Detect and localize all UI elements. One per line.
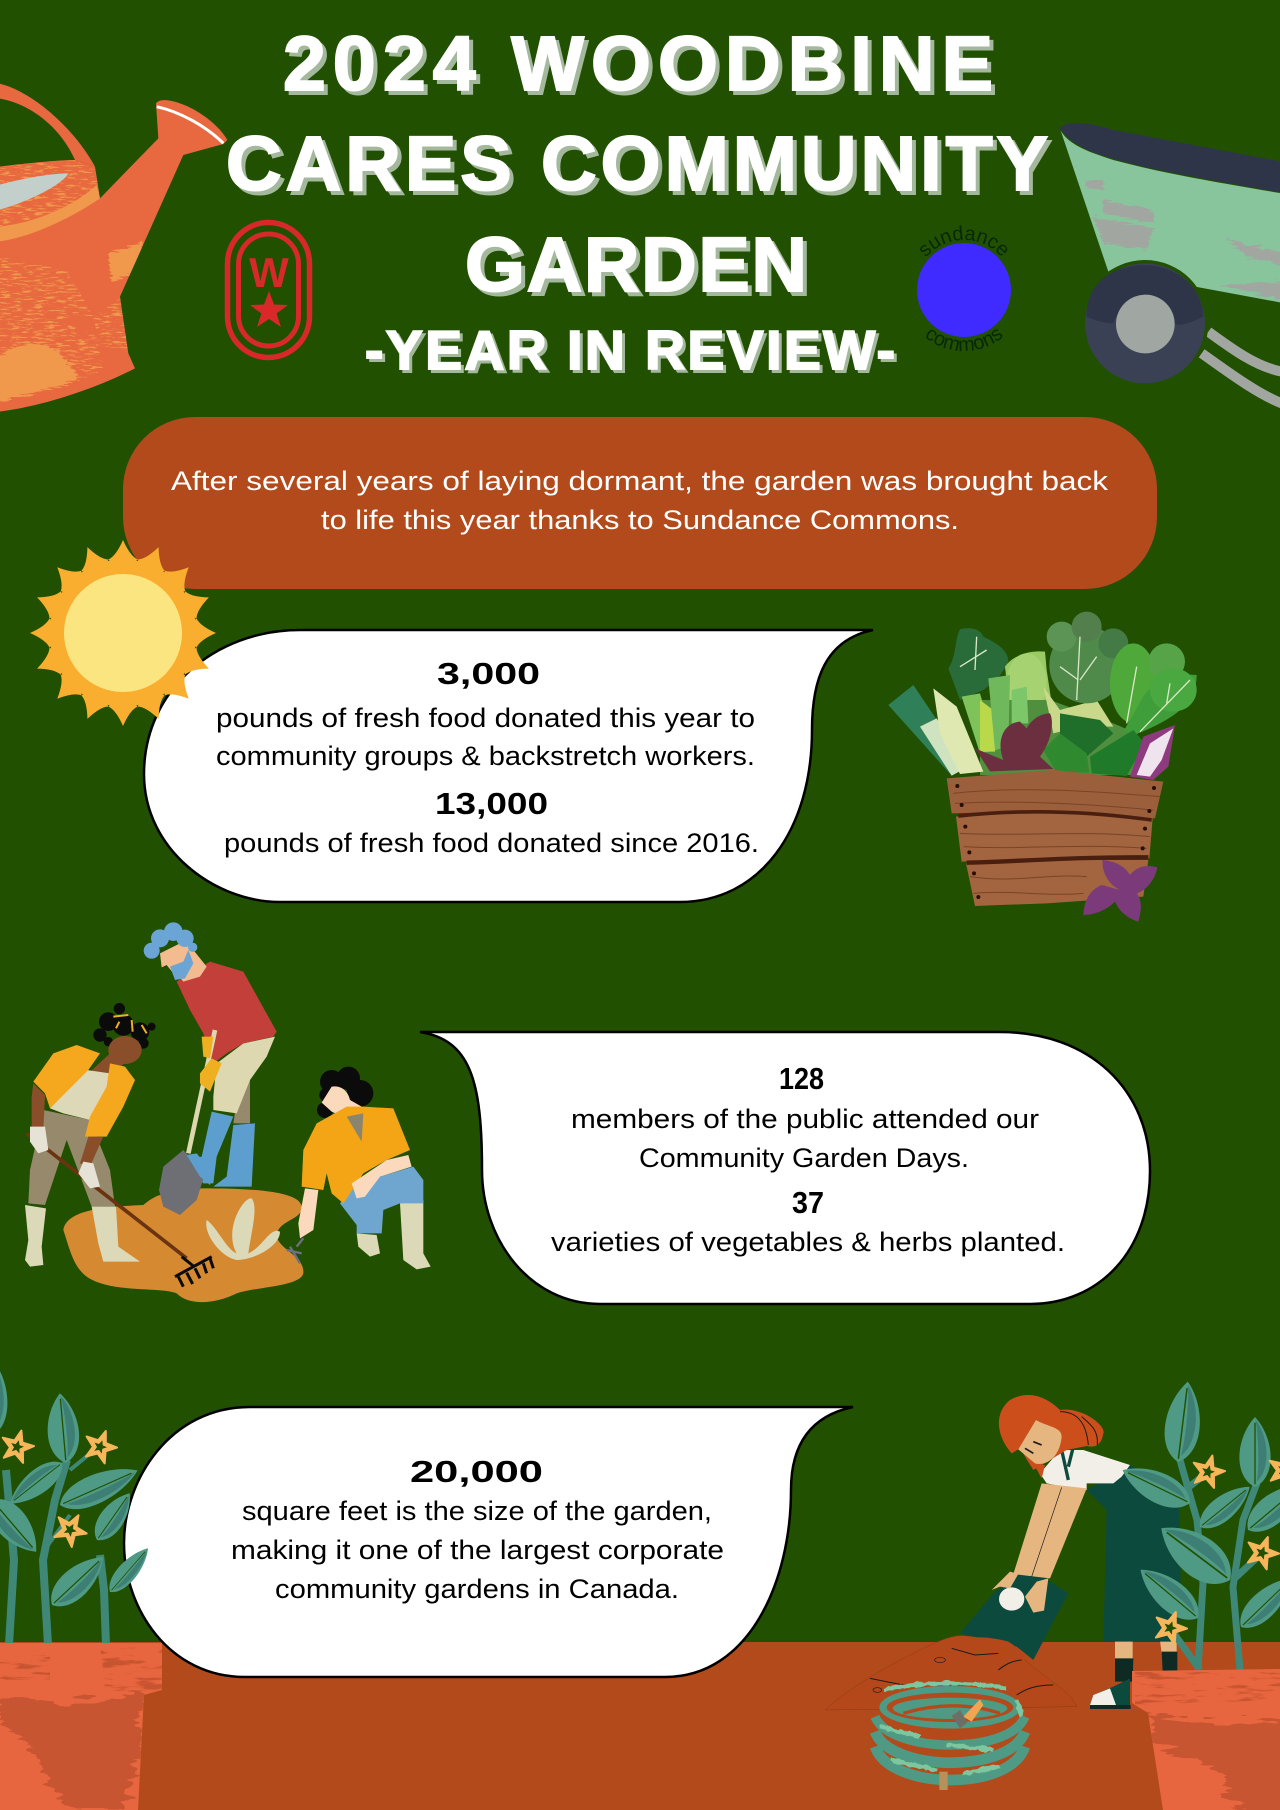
soil patch	[63, 1188, 303, 1302]
logo: Woodbine: W	[249, 249, 289, 296]
logo: Woodbine	[228, 222, 310, 358]
panel: speech bubble community days	[420, 1032, 1150, 1304]
panel: speech bubble garden size: 20,000	[410, 1454, 543, 1489]
title: GARDEN	[469, 226, 811, 312]
panel: speech bubble food donated: pounds of fresh food donated this year to	[216, 703, 755, 733]
panel: speech bubble food donated: 3,000	[437, 656, 540, 691]
icon: vegetable basket	[888, 612, 1197, 922]
panel: speech bubble garden size: making it one of the largest corporate	[231, 1535, 724, 1565]
title: 2024 WOODBINE	[287, 25, 997, 111]
illustration: right flower pot	[1132, 1669, 1280, 1810]
illustration: right flower plants	[1116, 1379, 1280, 1670]
icon: watering can	[0, 83, 227, 412]
title: 2024 WOODBINE	[283, 21, 993, 107]
title: CARES COMMUNITY	[226, 121, 1048, 207]
panel: speech bubble community days: varieties of vegetables & herbs planted.	[551, 1227, 1065, 1257]
panel: speech bubble community days: 37	[792, 1185, 824, 1220]
panel: intro banner: After several years of laying dormant, the garden was brought back	[171, 466, 1109, 496]
sack	[960, 1567, 1068, 1660]
gardener: man with shovel	[144, 922, 277, 1215]
panel: intro banner: to life this year thanks to Sundance Commons.	[321, 505, 959, 535]
ground band	[0, 1642, 1280, 1810]
dirt pile	[825, 1636, 1077, 1710]
figure	[992, 1395, 1181, 1709]
panel: speech bubble garden size: community gardens in Canada.	[275, 1574, 679, 1604]
panel: speech bubble food donated	[144, 630, 873, 902]
title: CARES COMMUNITY	[230, 125, 1052, 211]
gardener: crouching woman	[287, 1067, 431, 1269]
title: GARDEN	[465, 222, 807, 308]
illustration: left flower plants	[0, 1360, 155, 1645]
garden hose	[875, 1683, 1025, 1790]
panel: speech bubble garden size	[124, 1407, 853, 1677]
panel: speech bubble community days: 128	[779, 1061, 824, 1096]
illustration: three gardeners	[25, 922, 431, 1302]
title: -YEAR IN REVIEW-	[368, 322, 898, 384]
title	[226, 21, 1052, 384]
logo: Sundance Commons: commons	[926, 330, 1002, 352]
panel: speech bubble garden size: square feet is the size of the garden,	[242, 1496, 712, 1526]
panel: speech bubble food donated: 13,000	[435, 786, 548, 821]
small plant	[206, 1198, 280, 1260]
icon: sun	[30, 540, 216, 726]
icon: wheelbarrow	[1060, 123, 1280, 403]
illustration: woman bending with sack	[825, 1395, 1181, 1790]
panel: speech bubble food donated: pounds of fresh food donated since 2016.	[224, 828, 759, 858]
title: -YEAR IN REVIEW-	[365, 319, 895, 381]
panel: speech bubble community days: members of the public attended our	[571, 1104, 1039, 1134]
panel: speech bubble community days: Community Garden Days.	[639, 1143, 969, 1173]
logo: Sundance Commons: sundance	[920, 226, 1008, 256]
panel: speech bubble food donated: community groups & backstretch workers.	[216, 741, 755, 771]
logo: Sundance Commons	[917, 226, 1011, 352]
panel: intro banner	[123, 417, 1157, 589]
illustration: left flower pot	[0, 1643, 165, 1810]
gardener: left woman	[25, 1003, 213, 1287]
